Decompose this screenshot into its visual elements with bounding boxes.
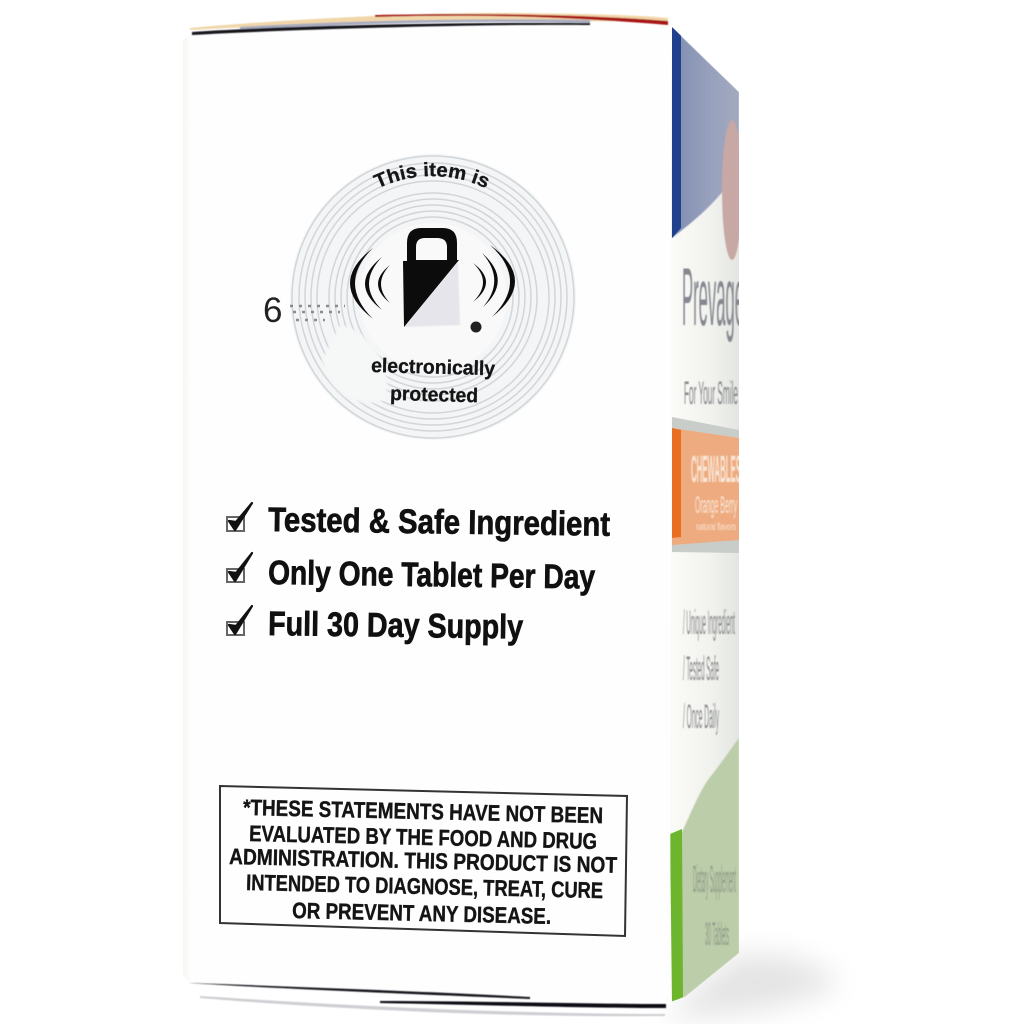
side grey bands <box>672 417 739 553</box>
product box illustration: Dietary Supplement <box>693 859 736 901</box>
side orange strip <box>672 428 681 538</box>
box side panel <box>670 20 744 1010</box>
side benefit list <box>683 604 735 736</box>
signal arcs right <box>473 245 515 317</box>
disclaimer text <box>229 795 618 929</box>
side orange label text <box>690 455 739 530</box>
sticker caption: protected <box>390 383 478 407</box>
side blue strip <box>672 27 681 238</box>
side orange label <box>672 428 739 545</box>
sticker chip <box>404 262 460 327</box>
sticker worn patch <box>322 325 387 403</box>
lock icon <box>403 228 459 327</box>
product box illustration: Orange Berry <box>695 492 737 519</box>
side panel base <box>675 76 739 944</box>
side green wave footer <box>675 738 739 1000</box>
signal arcs left <box>350 248 390 319</box>
box top rim <box>190 13 668 35</box>
sticker antenna rings <box>292 156 574 438</box>
disclaimer text: INTENDED TO DIAGNOSE, TREAT, CURE <box>246 870 603 903</box>
sticker center patch <box>359 223 507 371</box>
product box illustration: For Your Smile <box>684 375 738 411</box>
sticker caption: electronically <box>371 355 496 380</box>
disclaimer text: OR PREVENT ANY DISEASE. <box>292 898 551 929</box>
product box illustration: Prevage <box>682 252 744 343</box>
benefit 1: Tested & Safe Ingredient <box>268 501 610 544</box>
side orange label text: natural flavors <box>696 522 736 533</box>
disclaimer text: *THESE STATEMENTS HAVE NOT BEEN <box>243 795 603 828</box>
benefit 3: Full 30 Day Supply <box>268 605 523 647</box>
side blue wave header <box>672 27 739 238</box>
disclaimer border <box>220 786 627 936</box>
side green strip <box>670 829 683 1002</box>
front panel left edge shading <box>183 34 192 985</box>
benefits checklist <box>227 501 610 647</box>
sticker caption <box>371 355 496 407</box>
disclaimer text: ADMINISTRATION. THIS PRODUCT IS NOT <box>229 844 618 878</box>
product box illustration: / Tested Safe <box>683 650 719 688</box>
box bottom rim <box>189 983 666 1016</box>
product box illustration: CHEWABLES <box>691 449 741 491</box>
security sticker <box>263 154 576 440</box>
disclaimer text: EVALUATED BY THE FOOD AND DRUG <box>249 821 597 854</box>
product box illustration: / Unique Ingredient <box>683 604 735 642</box>
sticker curved heading: This item is <box>372 162 488 188</box>
product box illustration: / Once Daily <box>683 698 719 736</box>
side green footer text <box>693 864 736 946</box>
box front panel <box>190 25 672 1005</box>
side mauve circle <box>722 120 739 260</box>
product box illustration <box>183 12 833 1023</box>
benefit 2: Only One Tablet Per Day <box>268 554 595 597</box>
product box illustration: 30 Tablets <box>705 916 729 952</box>
registered dot <box>470 322 482 332</box>
shadow under box <box>665 954 838 1017</box>
FDA disclaimer box <box>220 786 627 936</box>
sticker disk <box>290 154 576 440</box>
stray digit: 6 <box>263 291 282 330</box>
dotted antenna trace <box>290 306 345 320</box>
